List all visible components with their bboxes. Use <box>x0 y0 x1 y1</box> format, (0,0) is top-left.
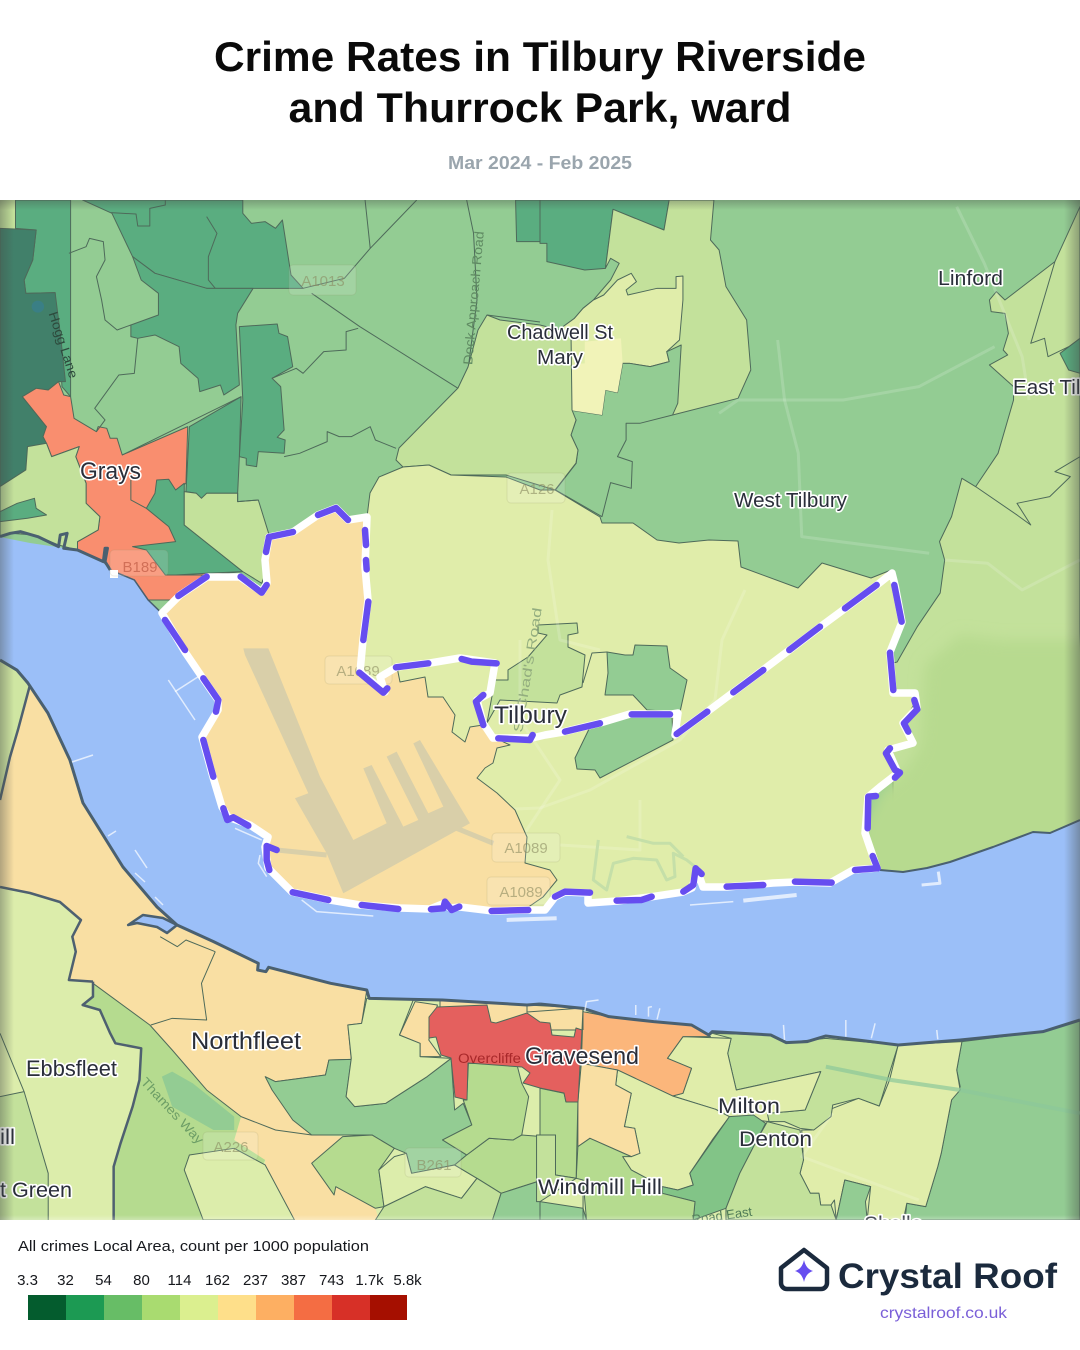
lower east green patch <box>868 633 1080 871</box>
street name labels: Thames Way <box>138 1074 207 1147</box>
title: Mar 2024 - Feb 2025 <box>448 153 632 173</box>
place name labels: Linford <box>938 268 1003 290</box>
east shoreline <box>880 820 1080 872</box>
north central light green ward <box>396 315 578 490</box>
website: crystalroof.co.uk <box>880 1305 1008 1322</box>
road labels: A1089 <box>504 840 548 857</box>
street name labels: St Chad's Road <box>510 607 545 733</box>
road labels: A1089 <box>336 663 380 680</box>
Tilbury ward boundary white <box>162 508 917 911</box>
title <box>0 0 1080 200</box>
Overcliffe red ward <box>440 1000 583 1030</box>
road labels: A1013 <box>301 273 345 290</box>
port docks <box>243 648 493 893</box>
south shoreline <box>0 660 1080 1045</box>
Tilbury ward boundary purple dashes <box>165 508 917 911</box>
place name labels: Grays <box>80 458 141 485</box>
north shoreline <box>0 532 162 613</box>
legend title: All crimes Local Area, count per 1000 population <box>18 1238 369 1255</box>
legend colour scale <box>28 1295 407 1320</box>
legend <box>17 1238 422 1320</box>
road labels: A226 <box>213 1139 249 1156</box>
road labels: A1089 <box>499 884 543 901</box>
legend values: 237 <box>243 1272 268 1289</box>
place name labels: Denton <box>739 1128 812 1151</box>
legend values: 3.3 <box>17 1272 38 1289</box>
place name labels: t Green <box>0 1179 72 1202</box>
river <box>0 200 1080 1220</box>
legend values: 32 <box>57 1272 74 1289</box>
place name labels <box>0 268 1080 1236</box>
legend values: 162 <box>205 1272 230 1289</box>
title: and Thurrock Park, ward <box>288 84 792 131</box>
map edge vignette <box>0 200 1080 1220</box>
legend values: 743 <box>319 1272 344 1289</box>
map panel <box>0 200 1080 1220</box>
place name labels: Northfleet <box>191 1028 301 1055</box>
north-west wards <box>0 200 540 600</box>
road labels: B261 <box>416 1157 452 1174</box>
road labels <box>110 265 565 1177</box>
road labels: A126 <box>519 481 555 498</box>
street name labels: Dock Approach Road <box>460 231 487 365</box>
place name labels: Gravesend <box>525 1043 639 1070</box>
place name labels: Chadwell St <box>507 322 613 344</box>
place name labels: West Tilbury <box>734 490 847 512</box>
south east wards <box>537 1004 1080 1220</box>
street name labels <box>46 231 753 1227</box>
road labels: B189 <box>122 559 158 576</box>
place name labels: Tilbury <box>494 702 567 729</box>
place name labels: Windmill Hill <box>538 1176 662 1199</box>
north bank base <box>0 200 1080 911</box>
legend values <box>17 1272 422 1289</box>
north-east wards <box>540 200 1080 872</box>
place name labels: ill <box>0 1126 15 1149</box>
place name labels: Ebbsfleet <box>26 1056 117 1081</box>
fort moat <box>593 837 695 890</box>
legend values: 54 <box>95 1272 112 1289</box>
place name labels: Mary <box>537 347 583 369</box>
Tilbury housing wards <box>487 623 687 778</box>
title: Crime Rates in Tilbury Riverside <box>214 33 866 80</box>
roads in Tilbury <box>490 510 745 880</box>
legend values: 1.7k <box>355 1272 384 1289</box>
place name labels: Overcliffe <box>458 1051 521 1066</box>
south west wards <box>0 660 542 1220</box>
pier: white square at Grays <box>110 570 118 578</box>
legend values: 80 <box>133 1272 150 1289</box>
brand name: Crystal Roof <box>838 1257 1057 1296</box>
port of Tilbury area <box>162 508 557 911</box>
Tilbury ward yellow area <box>360 465 915 910</box>
icon: house with star <box>781 1250 827 1289</box>
logo: Crystal Roof <box>778 1248 1058 1322</box>
piers <box>72 677 940 1040</box>
street name labels: Hogg Lane <box>46 310 81 380</box>
legend values: 387 <box>281 1272 306 1289</box>
place name labels: Milton <box>718 1095 780 1118</box>
legend values: 114 <box>168 1272 191 1289</box>
legend values: 5.8k <box>393 1272 422 1289</box>
